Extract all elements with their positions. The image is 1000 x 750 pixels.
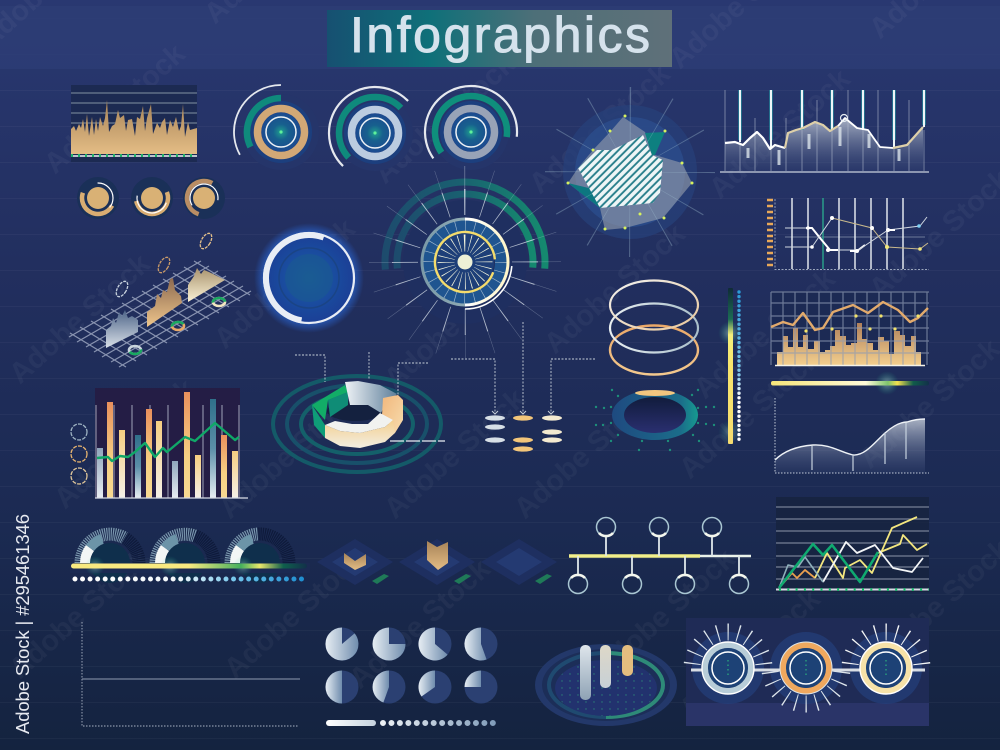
small gauges xyxy=(76,176,226,220)
gauge 1 xyxy=(217,68,345,196)
long gradient bar xyxy=(71,556,307,576)
dotted arrows and ellipse stacks xyxy=(451,322,595,452)
radial dial xyxy=(378,175,552,349)
pie progress row xyxy=(326,720,497,726)
stock watermarks: Adobe Stock xyxy=(213,382,367,525)
green tabs xyxy=(372,574,389,584)
horizontal glowing bar xyxy=(771,371,929,395)
outer faint spokes xyxy=(381,178,549,346)
side stock credit: Adobe Stock | #295461346 xyxy=(12,514,33,734)
title banner: Infographics xyxy=(350,7,650,63)
stock watermarks: Adobe Stock xyxy=(3,247,157,390)
outer teal arcs xyxy=(378,175,552,349)
smooth area chart xyxy=(775,398,929,473)
teal ellipse portal xyxy=(595,389,715,451)
concentric ellipses xyxy=(273,376,441,472)
radar nodes xyxy=(566,114,694,230)
stock watermarks: Adobe Stock xyxy=(48,372,202,515)
stock watermarks: Adobe Stock xyxy=(3,542,157,685)
hatched polygon xyxy=(578,135,663,208)
floating dashed rings xyxy=(114,231,214,299)
HUD connecting line xyxy=(691,668,925,672)
radar spokes xyxy=(574,116,686,228)
isometric tan bars xyxy=(147,278,182,327)
stock watermarks: Adobe Stock xyxy=(673,342,827,485)
stock watermarks: Adobe Stock xyxy=(508,382,662,525)
silver segment xyxy=(345,381,397,413)
tan segment xyxy=(382,395,403,433)
stock watermarks: Adobe Stock xyxy=(538,217,692,360)
stock watermarks: Adobe Stock xyxy=(703,62,857,205)
stacked rings xyxy=(610,280,698,374)
HUD spikes xyxy=(692,632,764,668)
isometric grid chart xyxy=(69,231,251,367)
tan folded shapes xyxy=(344,553,366,570)
stock watermarks: Adobe Stock xyxy=(523,57,677,200)
stock watermarks: Adobe Stock xyxy=(588,542,742,685)
stock watermarks: Adobe Stock xyxy=(688,262,842,405)
isometric floor grid xyxy=(69,261,251,367)
crossing lines chart xyxy=(767,198,929,270)
isometric cream bars xyxy=(188,268,225,302)
blue glowing orb xyxy=(254,223,364,333)
dot progress row xyxy=(75,576,303,582)
stock watermarks: Adobe Stock xyxy=(343,552,497,695)
left bars and green line chart xyxy=(71,388,248,498)
cream outer wall xyxy=(325,420,395,448)
stock watermarks: Adobe Stock xyxy=(673,582,827,725)
segmented blue band xyxy=(429,226,501,298)
network timeline xyxy=(568,518,751,594)
legend rings xyxy=(71,424,87,484)
3D donut chart xyxy=(273,352,445,472)
white ring xyxy=(422,219,508,305)
stock watermarks: Adobe Stock xyxy=(208,212,362,355)
gauge 3 xyxy=(407,68,535,196)
gauge 2 xyxy=(310,68,440,198)
skyline bar chart xyxy=(71,85,197,162)
inner spokes xyxy=(446,243,484,281)
isometric silver bars xyxy=(106,310,138,348)
top-right area line chart xyxy=(720,90,929,172)
empty dotted frame xyxy=(82,622,300,726)
radar teal wedges xyxy=(645,132,665,155)
grid ring markers xyxy=(129,298,225,354)
leader lines xyxy=(295,352,428,395)
stock watermarks: Adobe Stock xyxy=(218,542,372,685)
yellow arc xyxy=(427,224,503,300)
half-circle gauges xyxy=(70,534,310,583)
radar grey polygon xyxy=(568,117,692,230)
isometric diamonds xyxy=(317,539,557,585)
radar chart xyxy=(563,105,697,239)
vertical progress bar xyxy=(718,288,742,444)
outer bright spokes xyxy=(405,202,525,322)
bars and line chart with grid xyxy=(771,291,929,366)
multi-line chart xyxy=(776,497,929,592)
stock watermarks: Adobe Stock xyxy=(378,382,532,525)
bars on disc xyxy=(535,644,677,726)
dial hub xyxy=(458,254,472,270)
stock watermarks: Adobe Stock xyxy=(368,47,522,190)
HUD rings panel xyxy=(686,618,929,726)
cream top surface xyxy=(325,413,393,433)
vertical dot column xyxy=(737,292,741,442)
stock watermarks: Adobe Stock xyxy=(38,37,192,180)
green segment xyxy=(312,385,348,420)
stock watermarks: Adobe Stock xyxy=(378,252,532,395)
pie charts xyxy=(325,627,498,704)
